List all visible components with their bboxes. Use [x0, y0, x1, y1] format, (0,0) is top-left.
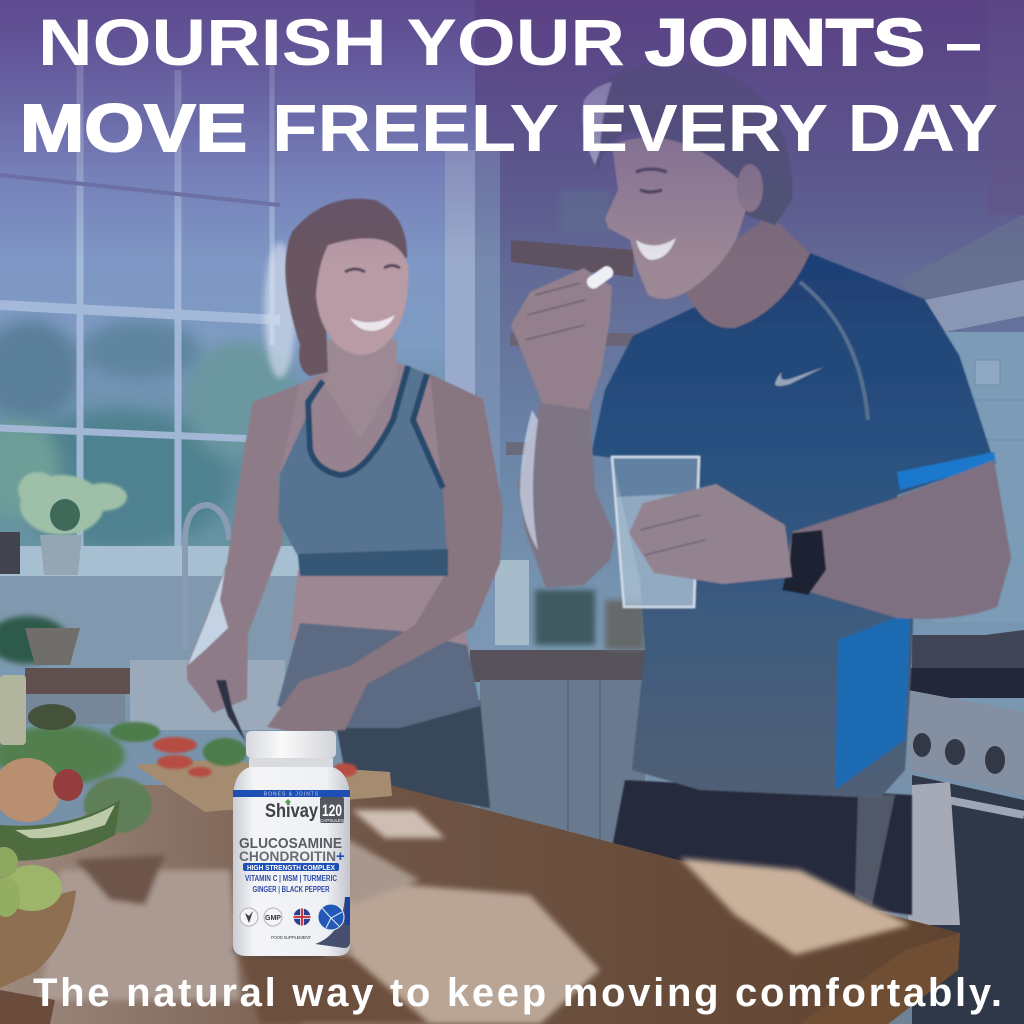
- title line 2: FREELY EVERY DAY: [272, 91, 998, 166]
- woman: midriff: [290, 570, 470, 650]
- tagline: The natural way to keep moving comfortably.: [33, 971, 1002, 1015]
- title line 1: JOINTS: [645, 5, 925, 79]
- backsplash and counter: [0, 576, 300, 666]
- title line 1: –: [945, 5, 982, 79]
- brand name: [265, 797, 344, 823]
- man: [511, 60, 1011, 915]
- product name: GINGER | BLACK PEPPER: [252, 885, 330, 894]
- woman: face: [316, 238, 408, 355]
- product name: HIGH STRENGTH COMPLEX: [247, 863, 335, 872]
- brand name: Shivay: [265, 801, 318, 822]
- man: arm with watch: [785, 460, 1011, 619]
- badges: GMP: [265, 915, 281, 922]
- product name: [239, 835, 345, 894]
- woman: sports top: [278, 366, 448, 575]
- product name: +: [336, 848, 345, 865]
- man: smartwatch: [782, 530, 826, 595]
- title line 1: NOURISH YOUR: [38, 5, 625, 79]
- woman: waistband and shorts: [277, 623, 480, 728]
- title line 1: [38, 5, 982, 79]
- woman: shoulders and chest: [280, 363, 443, 488]
- man: hair: [584, 60, 792, 225]
- product name: CHONDROITIN: [239, 848, 336, 864]
- icon: swoosh logo: [775, 367, 824, 386]
- range hood: [900, 214, 1024, 320]
- bottle cap: [246, 731, 336, 768]
- product name: VITAMIN C | MSM | TURMERIC: [245, 874, 337, 883]
- table: [0, 785, 960, 1024]
- man: head: [605, 137, 752, 299]
- woman: leggings: [335, 700, 490, 808]
- brand name: 120: [322, 801, 342, 820]
- capsule: [585, 264, 616, 291]
- fruit and salad, bottom left: [0, 675, 152, 988]
- glass of water: [612, 457, 699, 607]
- man: raised hand: [511, 268, 612, 410]
- badges: [240, 908, 310, 926]
- man: hand on glass: [629, 484, 792, 584]
- woman: right arm: [267, 374, 503, 732]
- product bottle: [231, 731, 351, 957]
- woman: neck: [325, 340, 397, 440]
- brand name: CAPSULES: [320, 818, 344, 823]
- stove and oven: [912, 630, 1024, 670]
- right wall and shelves: [475, 150, 500, 650]
- joint icon: [315, 897, 350, 948]
- man: t-shirt: [591, 253, 994, 798]
- woman: left arm: [187, 384, 310, 713]
- man: raised forearm: [518, 395, 615, 588]
- label band: BONES & JOINTS: [264, 792, 319, 798]
- wooden bowl with limes: [0, 847, 76, 988]
- window: [0, 0, 475, 576]
- woman: hair: [285, 199, 407, 376]
- top purple wash: [0, 0, 1024, 260]
- faucet: [185, 505, 229, 650]
- plants at sill: [0, 472, 127, 665]
- bottle body: [233, 767, 350, 956]
- title line 2: MOVE: [20, 91, 247, 166]
- hair glow: [264, 242, 296, 378]
- light patches: [40, 810, 910, 1024]
- title line 2: [20, 91, 998, 166]
- title: [20, 5, 998, 166]
- man: shorts: [612, 780, 912, 915]
- cutting board and vegetables: [110, 722, 392, 812]
- woman: knife: [216, 680, 246, 742]
- woman: [187, 199, 503, 808]
- man: neck: [680, 215, 810, 335]
- label band: [233, 790, 350, 798]
- product name: GLUCOSAMINE: [239, 835, 342, 852]
- food supplement note: FOOD SUPPLEMENT: [271, 935, 311, 940]
